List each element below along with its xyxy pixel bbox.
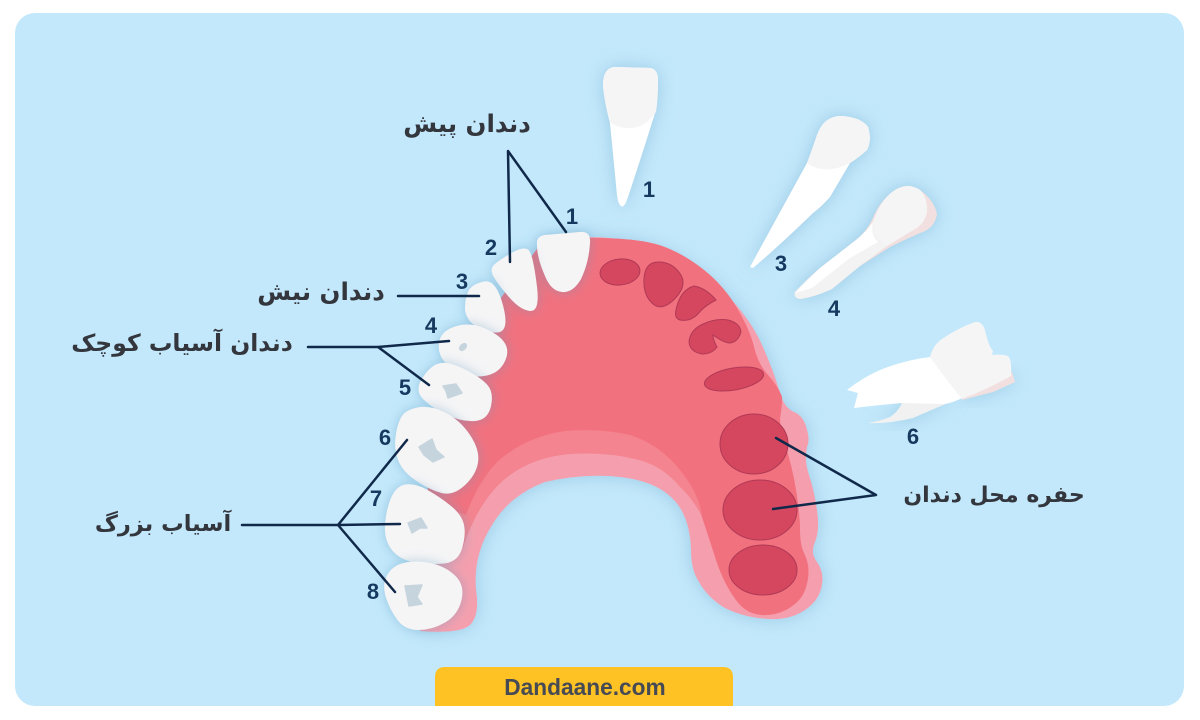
socket 7	[723, 480, 797, 540]
tooth 5 mark	[443, 384, 462, 398]
number 1: 1	[566, 204, 578, 229]
gum middle layer	[425, 238, 808, 615]
tooth 5	[418, 363, 492, 421]
gum main surface	[425, 238, 808, 615]
label: molars: آسیاب بزرگ	[95, 509, 232, 537]
label: premolars: دندان آسیاب کوچک	[71, 328, 293, 357]
number 5: 5	[399, 375, 411, 400]
detached tooth 4	[795, 186, 937, 299]
number 2: 2	[485, 235, 497, 260]
tooth 1	[537, 232, 590, 292]
socket 1	[599, 257, 641, 287]
footer brand tab	[435, 667, 733, 706]
tooth 3	[465, 281, 505, 333]
line: molars	[242, 440, 407, 592]
tooth 7 mark	[408, 518, 427, 533]
tooth sockets	[599, 257, 797, 595]
label: sockets: حفره محل دندان	[903, 483, 1085, 508]
detached number 1: 1	[643, 177, 655, 202]
tooth 6 mark	[419, 439, 444, 462]
socket 6	[720, 414, 788, 474]
tooth numbers	[367, 177, 919, 604]
leader lines	[242, 151, 876, 592]
line: sockets	[773, 438, 876, 509]
tooth 8 mark	[405, 585, 422, 606]
detached tooth 6	[847, 322, 1015, 423]
teeth row	[384, 232, 590, 630]
socket 8	[729, 545, 797, 595]
line: canine	[398, 295, 479, 297]
line: premolars	[308, 341, 449, 385]
number 3: 3	[456, 269, 468, 294]
number 6: 6	[379, 425, 391, 450]
tooth 4 mark	[458, 342, 468, 352]
footer brand tab: Dandaane.com	[504, 674, 666, 700]
number 4: 4	[425, 313, 438, 338]
label: canine: دندان نیش	[257, 277, 385, 306]
label: incisors: دندان پیش	[403, 109, 531, 138]
detached tooth 3	[750, 116, 870, 268]
tooth 8	[384, 562, 462, 630]
number 7: 7	[370, 486, 382, 511]
socket 5	[703, 363, 765, 395]
detached number 6: 6	[907, 424, 919, 449]
tooth 2	[492, 248, 538, 311]
detached number 3: 3	[775, 251, 787, 276]
gum outer layer	[420, 237, 822, 632]
detached tooth 1	[603, 67, 658, 207]
number 8: 8	[367, 579, 379, 604]
socket 3	[676, 286, 716, 320]
tooth 6	[395, 407, 478, 494]
line: incisors	[508, 151, 566, 262]
tooth 7	[385, 484, 465, 564]
detached number 4: 4	[828, 296, 841, 321]
gum arch	[420, 237, 822, 632]
socket 4	[689, 320, 741, 354]
socket 2	[644, 262, 683, 307]
tooth 4	[439, 324, 507, 376]
